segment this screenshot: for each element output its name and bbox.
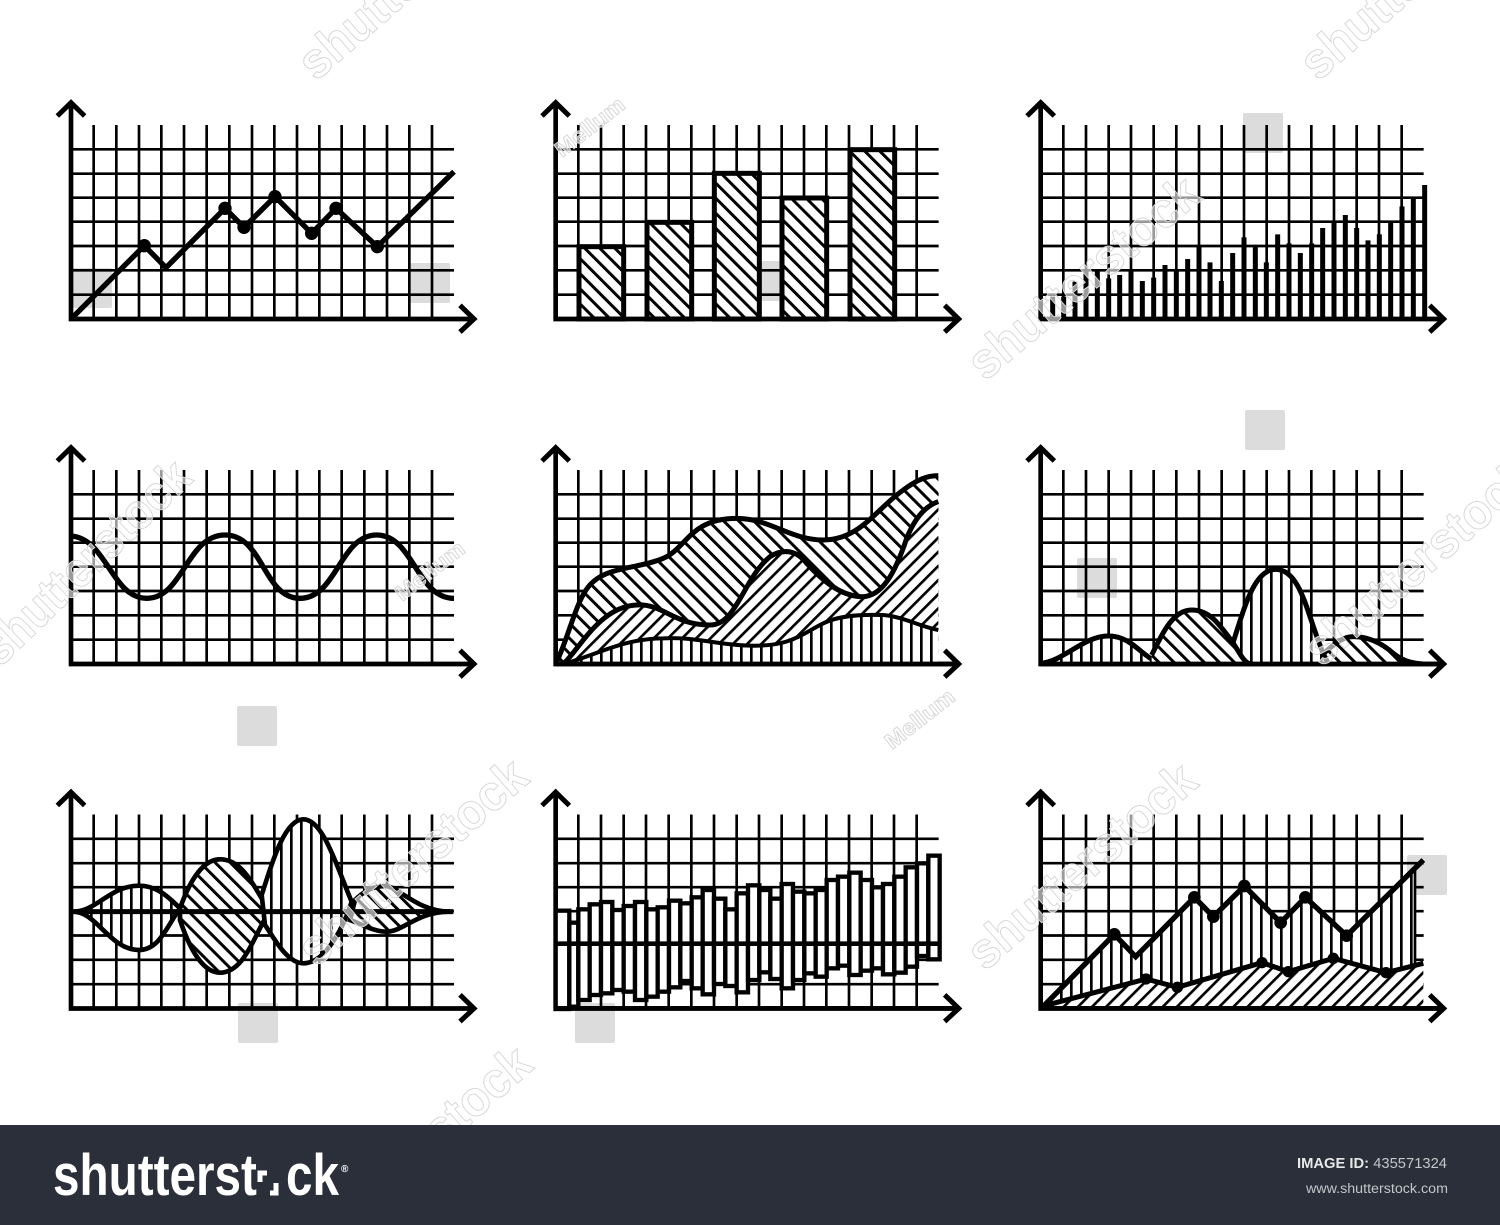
lens two [180, 859, 270, 973]
grid and axes [57, 792, 474, 1021]
upper area [1041, 868, 1415, 1009]
chart: mirrored lenses [57, 792, 474, 1021]
chart: wave [57, 448, 474, 677]
chart: hatched bars [542, 103, 959, 332]
website: www.shutterstock.com [1305, 1181, 1448, 1196]
watermark text: shutterstock [286, 747, 538, 976]
first hump [1041, 636, 1153, 664]
grid and axes [1027, 103, 1444, 332]
lens four [350, 886, 450, 932]
right edge of area [1411, 868, 1419, 967]
upper line [1041, 860, 1423, 1009]
chart: dense thin bars [1027, 103, 1444, 332]
chart: separated humps [1027, 448, 1444, 677]
range bars [556, 856, 940, 1009]
grid and axes [1027, 792, 1444, 1021]
baseline axis [556, 657, 960, 671]
footer logo: ® [341, 1164, 349, 1175]
thin bars [1053, 185, 1425, 319]
lens three [262, 819, 352, 963]
grid and axes [1027, 448, 1444, 677]
watermark text: Mellum [390, 536, 470, 606]
baseline axis [1041, 657, 1443, 671]
footer logo: shutterstock [53, 1143, 340, 1208]
second hump [1152, 610, 1250, 664]
top area [556, 476, 938, 664]
grid and axes [542, 103, 959, 332]
bottom area [563, 615, 938, 664]
chart: two line areas [1027, 792, 1444, 1021]
data line [71, 172, 454, 319]
grid and axes [542, 792, 959, 1021]
image id: IMAGE ID: 435571324 [1297, 1156, 1447, 1172]
baseline axis [1041, 1001, 1443, 1015]
watermark text: Mellum [550, 92, 630, 162]
last hump [1320, 637, 1423, 664]
footer bar [0, 1125, 1500, 1225]
watermark text: Mellum [880, 684, 960, 754]
chart: line with markers [57, 103, 474, 332]
centre line [71, 904, 453, 919]
chart: floating bars [542, 792, 959, 1021]
watermark text: shutterstock [956, 164, 1211, 390]
lower area [1041, 958, 1423, 1009]
upper markers [1108, 880, 1353, 942]
chart: layered area [542, 448, 960, 677]
grid and axes [57, 103, 474, 332]
watermark text: shutterstock [955, 751, 1207, 980]
lower line [1041, 958, 1423, 1007]
wave line [71, 535, 454, 598]
middle area [563, 502, 938, 664]
lower markers [1140, 953, 1392, 993]
grid and axes [57, 448, 474, 677]
data markers [138, 190, 384, 253]
grid and axes [542, 448, 959, 677]
tallest hump [1233, 569, 1328, 664]
lens one [73, 886, 180, 950]
baseline axis [556, 1001, 958, 1015]
watermark tiles [72, 113, 1447, 1043]
bars [579, 150, 895, 319]
centre line [556, 937, 940, 951]
